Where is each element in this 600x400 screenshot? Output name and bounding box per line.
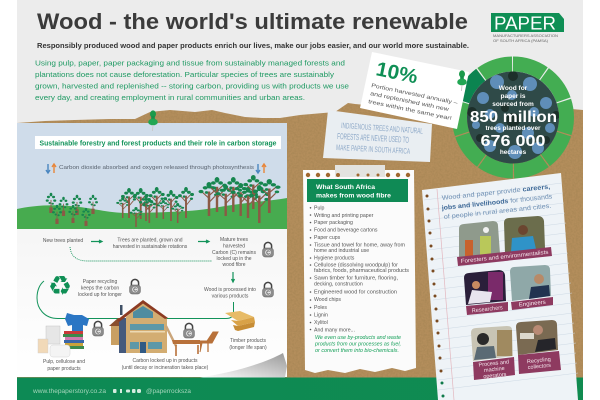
intro paragraph: Using pulp, paper, paper packaging and tissue from sustainably managed forests and	[35, 58, 345, 68]
step: planted and harvested: harvested in sustainable rotations	[113, 244, 188, 250]
carbon dioxide caption: Carbon dioxide absorbed and oxygen released through photosynthesis	[59, 165, 254, 171]
background: cork board	[17, 100, 583, 400]
binder holes	[306, 173, 410, 177]
careers heading	[440, 184, 553, 221]
list items: And many more...	[314, 328, 355, 334]
arrow	[91, 240, 102, 243]
panel heading	[35, 136, 281, 149]
note: 10% harvested: and replenished with new	[370, 91, 450, 113]
panel: what South Africa makes from wood fibre	[303, 165, 416, 373]
growing trees	[116, 187, 194, 227]
by-products note: or convert them into bio-chemicals.	[315, 348, 399, 354]
step: wood is processed: Wood is processed into	[204, 287, 256, 293]
donut text: 676 000	[480, 133, 546, 150]
panel heading: Sustainable forestry and forest products and their role in carbon storage	[40, 140, 277, 148]
careers heading: Wood and paper provide careers,	[441, 184, 551, 202]
icon: carbon lock	[184, 323, 194, 338]
timber caption	[229, 338, 267, 351]
paper products caption	[43, 359, 85, 372]
note: indigenous trees: FORESTS ARE NEVER USED TO	[337, 131, 410, 145]
step: planted and harvested: Trees are planted, grown and	[117, 238, 183, 244]
careers heading: jobs and livelihoods for thousands	[440, 193, 553, 212]
label: foresters and environmentalists: Foresters and environmentalists	[461, 250, 549, 265]
paper products caption: Pulp, cellulose and	[43, 359, 85, 365]
carbon dioxide caption	[46, 164, 266, 173]
intro paragraph: plantations does not cause deforestation. Particular species of trees are sustainably	[35, 70, 334, 79]
list items: Lignin	[314, 312, 328, 318]
label: researchers	[466, 302, 508, 315]
note: 10% harvested: Portion harvested annually –	[371, 83, 459, 107]
step: mature trees harvested: harvested	[223, 244, 245, 250]
label: recycling collectors: collectors	[528, 363, 552, 371]
donut text: paper is	[501, 93, 526, 100]
list heading	[307, 179, 408, 202]
logo: PAPER / PAMSA: PAPER	[494, 14, 556, 34]
paper ruled lines	[424, 183, 578, 390]
timber caption: Timber products	[230, 338, 266, 344]
page curl	[200, 353, 287, 378]
icon: paper products	[38, 313, 89, 357]
dotted recycling path	[70, 247, 212, 261]
paper recycling text: keeps the carbon	[81, 286, 119, 292]
step: mature trees harvested	[212, 237, 256, 268]
donut text: Wood for	[499, 85, 528, 92]
label: researchers: Researchers	[472, 305, 503, 314]
panel: careers lined paper	[422, 173, 578, 400]
label: recycling collectors	[518, 351, 561, 374]
photo: foresters	[459, 221, 500, 258]
icon: deck furniture	[166, 326, 218, 356]
list items: Food and beverage cartons	[314, 228, 378, 234]
photo: researcher	[464, 270, 506, 305]
photo: engineer	[510, 265, 551, 301]
donut text: sourced from	[492, 101, 534, 108]
list items: Wood chips	[314, 297, 341, 303]
intro paragraph	[35, 58, 349, 102]
mature trees	[198, 175, 281, 223]
by-products note: products from our processes as fuel,	[314, 342, 401, 348]
icon: carbon lock	[130, 279, 140, 294]
intro paragraph: grown, harvested and replenished -- storing carbon, providing us with products we use	[35, 82, 349, 90]
donut photo centre	[467, 71, 560, 164]
step: mature trees harvested: wood fibre	[222, 262, 246, 268]
note: 10% harvested: trees within the same year!	[368, 99, 453, 122]
list heading: makes from wood fibre	[316, 192, 391, 200]
step: wood is processed: various products	[212, 294, 249, 300]
list items: Paper packaging	[314, 220, 353, 226]
footer bar	[17, 378, 583, 400]
paper recycling text: Paper recycling	[83, 279, 117, 285]
list items: fabrics, foods, pharmaceutical products	[314, 268, 409, 274]
panel: sustainable forestry and carbon storage	[17, 123, 287, 377]
list items	[314, 206, 409, 334]
sky	[17, 123, 287, 229]
list items: Poles	[314, 305, 327, 311]
label: engineers	[511, 297, 553, 310]
by-products note	[314, 335, 401, 354]
icon: carbon lock	[263, 242, 273, 257]
list items: Writing and printing paper	[314, 213, 374, 219]
carbon locked caption	[122, 358, 209, 371]
step: new trees planted: New trees planted	[43, 238, 83, 244]
new saplings	[46, 193, 98, 226]
label: process and machine operators	[473, 357, 515, 380]
icon: pin on forestry panel	[148, 110, 158, 131]
list items: Xylitol	[314, 320, 328, 326]
title: Wood - the world's ultimate renewable	[37, 9, 468, 34]
stat donut: 850 million trees	[453, 56, 574, 178]
logo: PAPER / PAMSA: MANUFACTURERS ASSOCIATION	[493, 34, 558, 38]
label: engineers: Engineers	[519, 300, 546, 308]
note: indigenous trees: MAKE PAPER IN SOUTH AFRICA	[336, 143, 411, 156]
icon: house	[109, 300, 168, 353]
list items: decking, construction	[314, 282, 363, 288]
step: planted and harvested	[113, 238, 188, 250]
note: 10% harvested: 10%	[374, 58, 420, 88]
timber caption: (longer life span)	[229, 345, 267, 351]
logo: PAPER / PAMSA	[491, 13, 564, 43]
footer bar: @paperrocksza	[146, 388, 192, 395]
step: mature trees harvested: Mature trees	[220, 237, 249, 243]
list bullets	[310, 207, 311, 330]
paper recycling text: locked up for longer	[78, 292, 122, 298]
careers heading: of people in rural areas and cities.	[443, 203, 552, 221]
label: process and machine operators: Process and	[478, 359, 509, 369]
list heading: What South Africa	[316, 184, 375, 191]
icon: timber planks	[225, 311, 255, 331]
by-products note: We even use by-products and waste	[315, 335, 401, 341]
list items: Hygiene products	[314, 256, 355, 262]
photo: recycling collector	[516, 320, 558, 355]
icon: carbon lock	[263, 282, 273, 297]
step: mature trees harvested: locked up in the	[216, 256, 252, 262]
step: mature trees harvested: Carbon (C) remains	[212, 250, 256, 256]
hills	[17, 198, 287, 229]
icon: pin on 10% note	[457, 70, 467, 91]
arrow	[198, 240, 209, 243]
footer bar: www.thepaperstory.co.za	[32, 388, 107, 395]
logo: PAPER / PAMSA: OF SOUTH AFRICA (PAMSA)	[493, 39, 548, 43]
paper recycling text	[78, 279, 122, 298]
margin line	[437, 189, 454, 400]
tape	[335, 165, 385, 177]
step: wood is processed	[204, 287, 256, 300]
donut text: hectares	[500, 149, 527, 156]
note: indigenous trees: INDIGENOUS TREES AND NATURAL	[341, 121, 424, 136]
paper products caption: paper products	[47, 366, 81, 372]
social icons	[113, 389, 141, 393]
note: 10% harvested	[360, 52, 469, 129]
list items: Tissue and towel for home, away from	[314, 242, 405, 248]
donut text: 850 million	[470, 109, 557, 126]
note: indigenous trees	[323, 110, 432, 162]
list items: Pulp	[314, 206, 324, 212]
flow line with recycling arrow	[37, 281, 234, 318]
list items: Sawn timber for furniture, flooring,	[314, 276, 398, 282]
list items: Paper cups	[314, 235, 341, 241]
icon: carbon lock	[93, 321, 103, 336]
label: process and machine operators: operators	[483, 372, 507, 380]
label: process and machine operators: machine	[484, 366, 505, 374]
photo: environmentalist	[504, 216, 545, 253]
label: foresters and environmentalists	[457, 247, 552, 266]
label: recycling collectors: Recycling	[527, 357, 551, 365]
subtitle: Responsibly produced wood and paper products enrich our lives, make our jobs easier, and our world more sustainable.	[37, 41, 469, 50]
donut text: trees planted over	[485, 125, 541, 132]
punch holes	[426, 194, 444, 398]
background: torn grey paper header	[17, 0, 583, 123]
arrow down	[232, 272, 234, 282]
photo: process operator	[471, 326, 513, 361]
icon: recycle: ♻	[48, 271, 72, 302]
list items: Cellulose (dissolving woodpulp) for	[314, 262, 398, 268]
carbon locked caption: (until decay or incineration takes place)	[122, 365, 209, 371]
carbon locked caption: Carbon locked up in products	[132, 358, 198, 364]
donut text	[470, 85, 557, 156]
list items: Engineered wood for construction	[314, 290, 397, 296]
list items: home and industrial use	[314, 248, 369, 254]
intro paragraph: every day, and creating employment in rural communities and urban areas.	[35, 93, 305, 102]
